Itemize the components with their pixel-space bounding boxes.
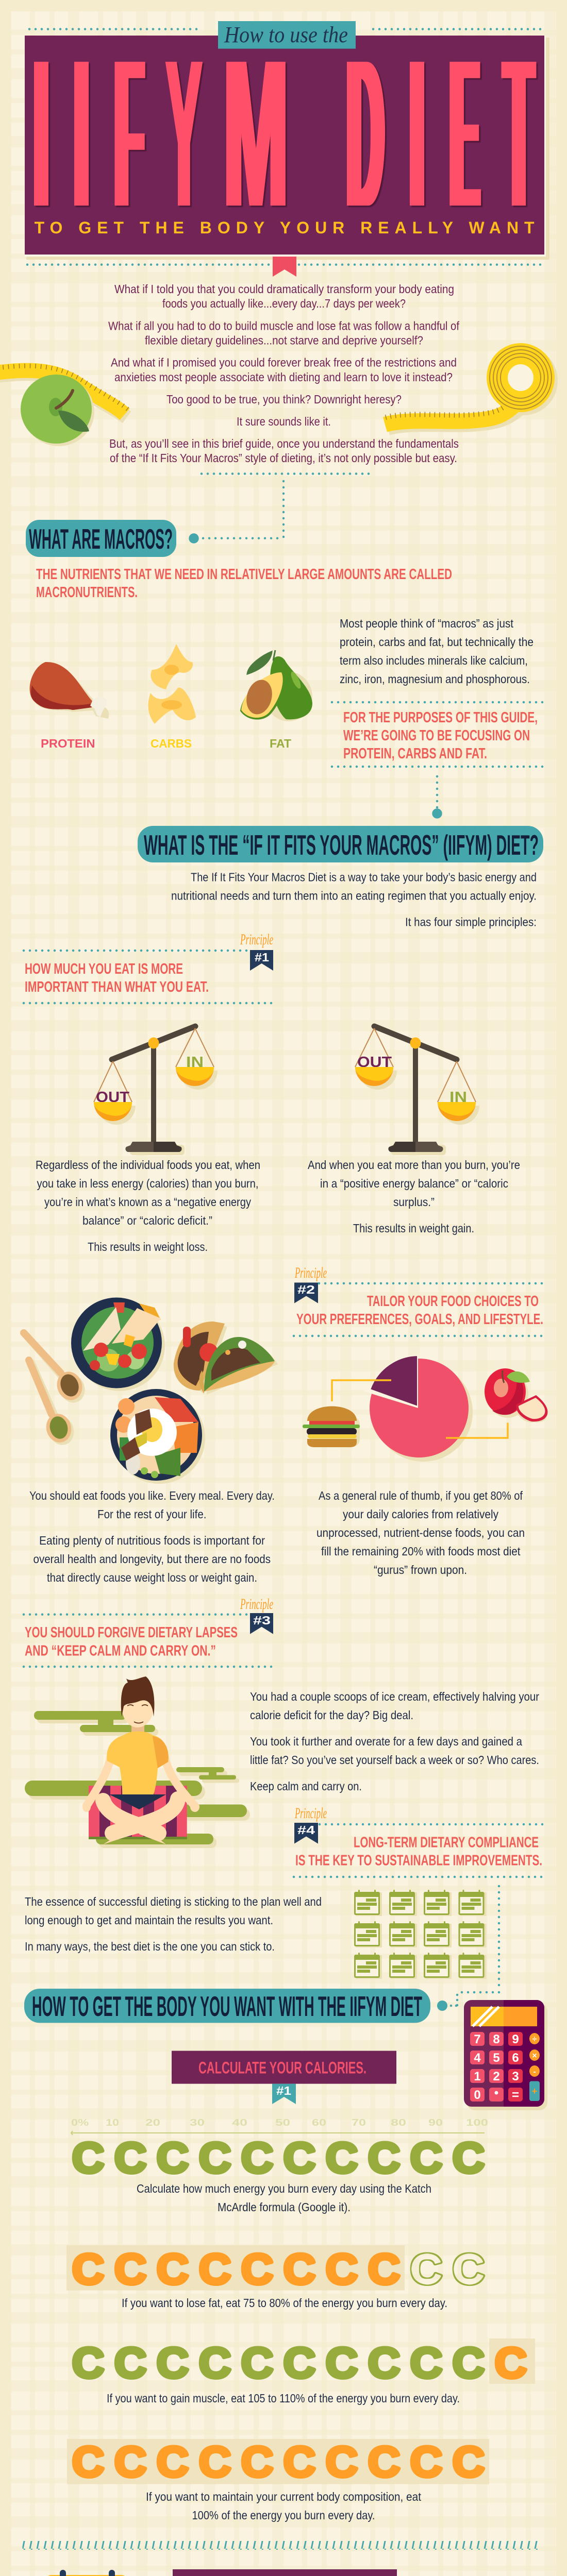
calorie row: gain muscle: CCCCCCCCCC <box>72 2338 485 2386</box>
icon: calculator: = <box>512 2088 519 2102</box>
text: keep calm: You took it further and overate for a few days and gained a <box>250 1735 522 1748</box>
text: keep calm: You had a couple scoops of ice cream, effectively halving your <box>250 1690 539 1703</box>
calorie row: baseline 100 percent: CCCCCCCCCC <box>72 2133 485 2181</box>
icon: calculator <box>464 2000 547 2110</box>
IIFYM definition text: It has four simple principles: <box>405 915 537 928</box>
subheading: macronutrients <box>36 566 452 601</box>
icon: bowl with fried egg <box>110 1389 205 1484</box>
principle 1 heading: HOW MUCH YOU EAT IS MORE <box>25 961 183 977</box>
icon: calculator: ÷ <box>532 2035 537 2044</box>
icon: calculator: × <box>532 2052 537 2060</box>
text: positive energy balance: in a “positive energy balance” or “caloric <box>320 1177 508 1190</box>
calorie row: lose fat <box>66 2245 485 2310</box>
principle 1 heading: IMPORTANT THAN WHAT YOU EAT. <box>25 979 209 995</box>
icon: coiled measuring tape <box>385 343 558 428</box>
icon: scale tipped toward out <box>94 1026 218 1155</box>
principle 1 marker: #1 <box>255 951 269 964</box>
text: negative energy balance: Regardless of the individual foods you eat, when <box>36 1158 260 1172</box>
icon: scale tipped toward in: OUT <box>357 1054 392 1071</box>
text: compliance: In many ways, the best diet is the one you can stick to. <box>25 1940 275 1953</box>
step 1 banner: calculate your calories <box>172 2051 396 2104</box>
percent axis: 10 <box>106 2117 119 2128</box>
principle 1 marker: Principle <box>240 931 273 948</box>
step 1 banner: calculate your calories: CALCULATE YOUR CALORIES. <box>198 2059 366 2077</box>
script subtitle: How to use the <box>224 22 348 47</box>
calorie row: maintain: 100% of the energy you burn every day. <box>192 2509 375 2522</box>
macros explanation text: zinc, iron, magnesium and phosphorous. <box>340 672 530 686</box>
text: eat foods you like: overall health and longevity, but there are no foods <box>33 1552 271 1566</box>
principle 2 marker <box>294 1264 327 1303</box>
icon: apple with slice <box>485 1368 547 1422</box>
intro text: anxieties most people associate with dieting and learn to love it instead? <box>114 370 453 384</box>
macros explanation text <box>340 617 533 686</box>
text: compliance: long enough to get and maintain the results you want. <box>25 1913 273 1927</box>
principle 3 marker <box>240 1596 273 1634</box>
icon: calculator: 4 <box>474 2051 481 2065</box>
text: keep calm: Keep calm and carry on. <box>250 1780 362 1793</box>
main title: IIFYM DIET: M <box>224 10 288 257</box>
text: 80 percent rule: unprocessed, nutrient-dense foods, you can <box>316 1526 525 1539</box>
calorie row: lose fat: CCCCCCCC <box>72 2245 400 2293</box>
clouds <box>25 1711 250 1848</box>
icon: calculator: 7 <box>474 2032 481 2046</box>
macro labels: PROTEIN <box>41 737 95 750</box>
text: eat foods you like: that directly cause weight loss or weight gain. <box>47 1571 257 1584</box>
percent axis <box>71 2117 488 2135</box>
step 2 banner: set up your macros <box>173 2569 397 2576</box>
text: positive energy balance <box>308 1158 520 1235</box>
icon: calculator: 3 <box>512 2070 519 2083</box>
principle 2 marker: Principle <box>294 1264 327 1281</box>
principle 3 heading: AND “KEEP CALM AND CARRY ON.” <box>25 1642 216 1659</box>
calorie row: maintain: If you want to maintain your current body composition, eat <box>146 2490 422 2503</box>
icon: calculator: • <box>494 2086 498 2100</box>
percent axis: 30 <box>190 2117 205 2128</box>
title banner <box>25 9 549 277</box>
intro text <box>108 282 460 465</box>
percent axis: 20 <box>145 2117 160 2128</box>
percent axis: 100 <box>466 2117 488 2128</box>
principle 3 marker: Principle <box>240 1596 273 1613</box>
percent axis: 80 <box>391 2117 406 2128</box>
calorie row: gain muscle <box>72 2338 535 2405</box>
calorie row: baseline 100 percent: McArdle formula (Google it). <box>218 2200 351 2214</box>
text: 80 percent rule: As a general rule of thumb, if you get 80% of <box>319 1489 523 1502</box>
main title: IIFYM DIET: E <box>451 10 478 257</box>
text: keep calm <box>250 1690 539 1793</box>
macros explanation text: Most people think of “macros” as just <box>340 617 514 630</box>
macro labels <box>41 737 291 750</box>
text: 80 percent rule: your daily calories from relatively <box>343 1507 498 1521</box>
text: 80 percent rule <box>316 1489 525 1577</box>
text: negative energy balance: you’re in what’s known as a “negative energy <box>44 1195 251 1209</box>
illustration: meditating man on clouds <box>25 1676 250 1848</box>
percent axis: 0% <box>71 2117 89 2128</box>
main title: IIFYM DIET <box>27 9 533 257</box>
text: negative energy balance: balance” or “caloric deficit.” <box>82 1214 212 1227</box>
intro text: Too good to be true, you think? Downright heresy? <box>166 393 402 406</box>
text: eat foods you like: For the rest of your life. <box>97 1507 206 1521</box>
intro text: What if I told you that you could dramatically transform your body eating <box>114 282 454 296</box>
calorie row: baseline 100 percent <box>72 2133 485 2214</box>
macros explanation text: protein, carbs and fat, but technically the <box>340 635 533 649</box>
percent axis: 90 <box>428 2117 443 2128</box>
main title: IIFYM DIET: I <box>68 10 95 257</box>
text: eat foods you like <box>29 1489 275 1584</box>
calorie row: baseline 100 percent: Calculate how much energy you burn every day using the Katch <box>137 2182 431 2195</box>
calorie row: maintain <box>67 2437 489 2522</box>
icon: spoons with spices <box>24 1333 89 1448</box>
callout: focus on protein, carbs and fat <box>343 709 538 762</box>
percent axis: 50 <box>275 2117 290 2128</box>
principle 4 marker: #4 <box>297 1823 315 1837</box>
macro labels: FAT <box>270 737 291 750</box>
calorie row: gain muscle: C <box>495 2338 527 2386</box>
icon: calculator: 0 <box>474 2088 481 2102</box>
icon: tacos <box>174 1321 278 1395</box>
principle 1 marker <box>240 931 273 971</box>
intro text: But, as you’ll see in this brief guide, once you understand the fundamentals <box>109 437 459 450</box>
chart: 80/20 pie <box>332 1355 508 1462</box>
macros explanation text: term also includes minerals like calcium, <box>340 654 528 667</box>
icon: calculator: 9 <box>512 2032 519 2046</box>
icon: carbs pasta <box>148 644 196 724</box>
icon: scale tipped toward out: IN <box>186 1054 204 1071</box>
calorie row: lose fat: If you want to lose fat, eat 75 to 80% of the energy you burn every day. <box>122 2296 447 2310</box>
text: positive energy balance: This results in weight gain. <box>353 1222 474 1235</box>
icon: calculator: 8 <box>493 2032 500 2046</box>
callout: focus on protein, carbs and fat: PROTEIN, CARBS AND FAT. <box>343 745 487 762</box>
intro text: foods you actually like...every day...7 days per week? <box>162 297 406 310</box>
intro text: flexible dietary guidelines...not starve and deprive yourself? <box>145 334 423 347</box>
step 1 banner: calculate your calories: #1 <box>276 2084 291 2097</box>
icon: scale tipped toward in: IN <box>449 1089 467 1106</box>
text: eat foods you like: Eating plenty of nutritious foods is important for <box>39 1534 265 1547</box>
text: compliance <box>25 1895 322 1953</box>
icon: scale tipped toward in <box>355 1026 479 1155</box>
text: positive energy balance: And when you eat more than you burn, you’re <box>308 1158 520 1172</box>
text: 80 percent rule: “gurus” frown upon. <box>374 1563 467 1577</box>
icon: calculator: 2 <box>493 2070 500 2083</box>
text: negative energy balance: you take in less energy (calories) than you burn, <box>37 1177 259 1190</box>
main title: IIFYM DIET: D <box>347 9 383 257</box>
principle 2 marker: #2 <box>297 1283 315 1296</box>
icon: calculator: 6 <box>512 2051 519 2065</box>
principle 3 marker: #3 <box>253 1614 271 1627</box>
intro text: of the “If It Fits Your Macros” style of dieting, it’s not only possible but easy. <box>110 451 457 465</box>
icon: salad plate with wraps <box>71 1297 165 1391</box>
figure <box>82 1676 199 1844</box>
text: 80 percent rule: fill the remaining 20% with foods most diet <box>321 1545 521 1558</box>
main title: IIFYM DIET: I <box>403 10 431 257</box>
icon: scale tipped toward out: OUT <box>96 1089 129 1106</box>
macro labels: CARBS <box>151 737 192 750</box>
main title: IIFYM DIET: F <box>115 10 143 257</box>
principle 2 heading <box>296 1293 543 1328</box>
icon: calculator: 5 <box>493 2051 500 2065</box>
section heading: how to get the body <box>24 1989 430 2023</box>
principle 4 marker: Principle <box>294 1805 327 1822</box>
text: compliance: The essence of successful dieting is sticking to the plan well and <box>25 1895 322 1908</box>
intro text: It sure sounds like it. <box>237 415 331 428</box>
text: eat foods you like: You should eat foods you like. Every meal. Every day. <box>29 1489 275 1502</box>
text: positive energy balance: surplus.” <box>393 1195 435 1209</box>
subheading: macronutrients: MACRONUTRIENTS. <box>36 584 138 601</box>
text: WHAT ARE MACROS? <box>29 523 173 555</box>
calorie row: maintain: CCCCCCCCCC <box>72 2437 485 2485</box>
IIFYM definition text: nutritional needs and turn them into an eating regimen that you actually enjoy. <box>171 889 537 903</box>
main title: IIFYM DIET: T <box>504 9 533 257</box>
calorie row: gain muscle: If you want to gain muscle, eat 105 to 110% of the energy you burn every day. <box>107 2392 460 2405</box>
percent axis: 40 <box>232 2117 247 2128</box>
icon: fat avocado <box>240 650 312 721</box>
main title: IIFYM DIET: I <box>27 10 55 257</box>
text: negative energy balance: This results in weight loss. <box>88 1240 208 1253</box>
intro text: What if all you had to do to build muscle and lose fat was follow a handful of <box>108 319 460 333</box>
IIFYM definition text <box>171 871 537 928</box>
icon: calendar with plate <box>44 2570 132 2576</box>
percent axis: 60 <box>312 2117 326 2128</box>
main title: IIFYM DIET: Y <box>165 11 203 257</box>
percent axis: 70 <box>352 2117 366 2128</box>
principle 3 heading <box>25 1624 238 1659</box>
text: negative energy balance <box>36 1158 260 1253</box>
icon: green apple with measuring tape <box>0 366 129 446</box>
calorie row: lose fat: CC <box>410 2245 485 2293</box>
icon: protein drumstick <box>30 662 109 719</box>
principle 3 heading: YOU SHOULD FORGIVE DIETARY LAPSES <box>25 1624 238 1641</box>
icon: calculator: 1 <box>474 2070 481 2083</box>
icon: burger <box>303 1406 360 1447</box>
principle 4 marker <box>294 1805 327 1843</box>
text: keep calm: calorie deficit for the day? Big deal. <box>250 1708 413 1722</box>
tagline: TO GET THE BODY YOUR REALLY WANT <box>35 218 535 237</box>
section heading: what are macros <box>26 520 176 557</box>
icon: calculator: - <box>533 2067 536 2076</box>
icon: calculator: + <box>532 2086 537 2096</box>
principle 4 heading <box>295 1835 542 1869</box>
mat <box>89 1786 187 1839</box>
principle 1 heading <box>25 961 209 995</box>
icon: calendars grid <box>354 1890 487 1979</box>
intro text: And what if I promised you could forever break free of the restrictions and <box>111 356 457 369</box>
